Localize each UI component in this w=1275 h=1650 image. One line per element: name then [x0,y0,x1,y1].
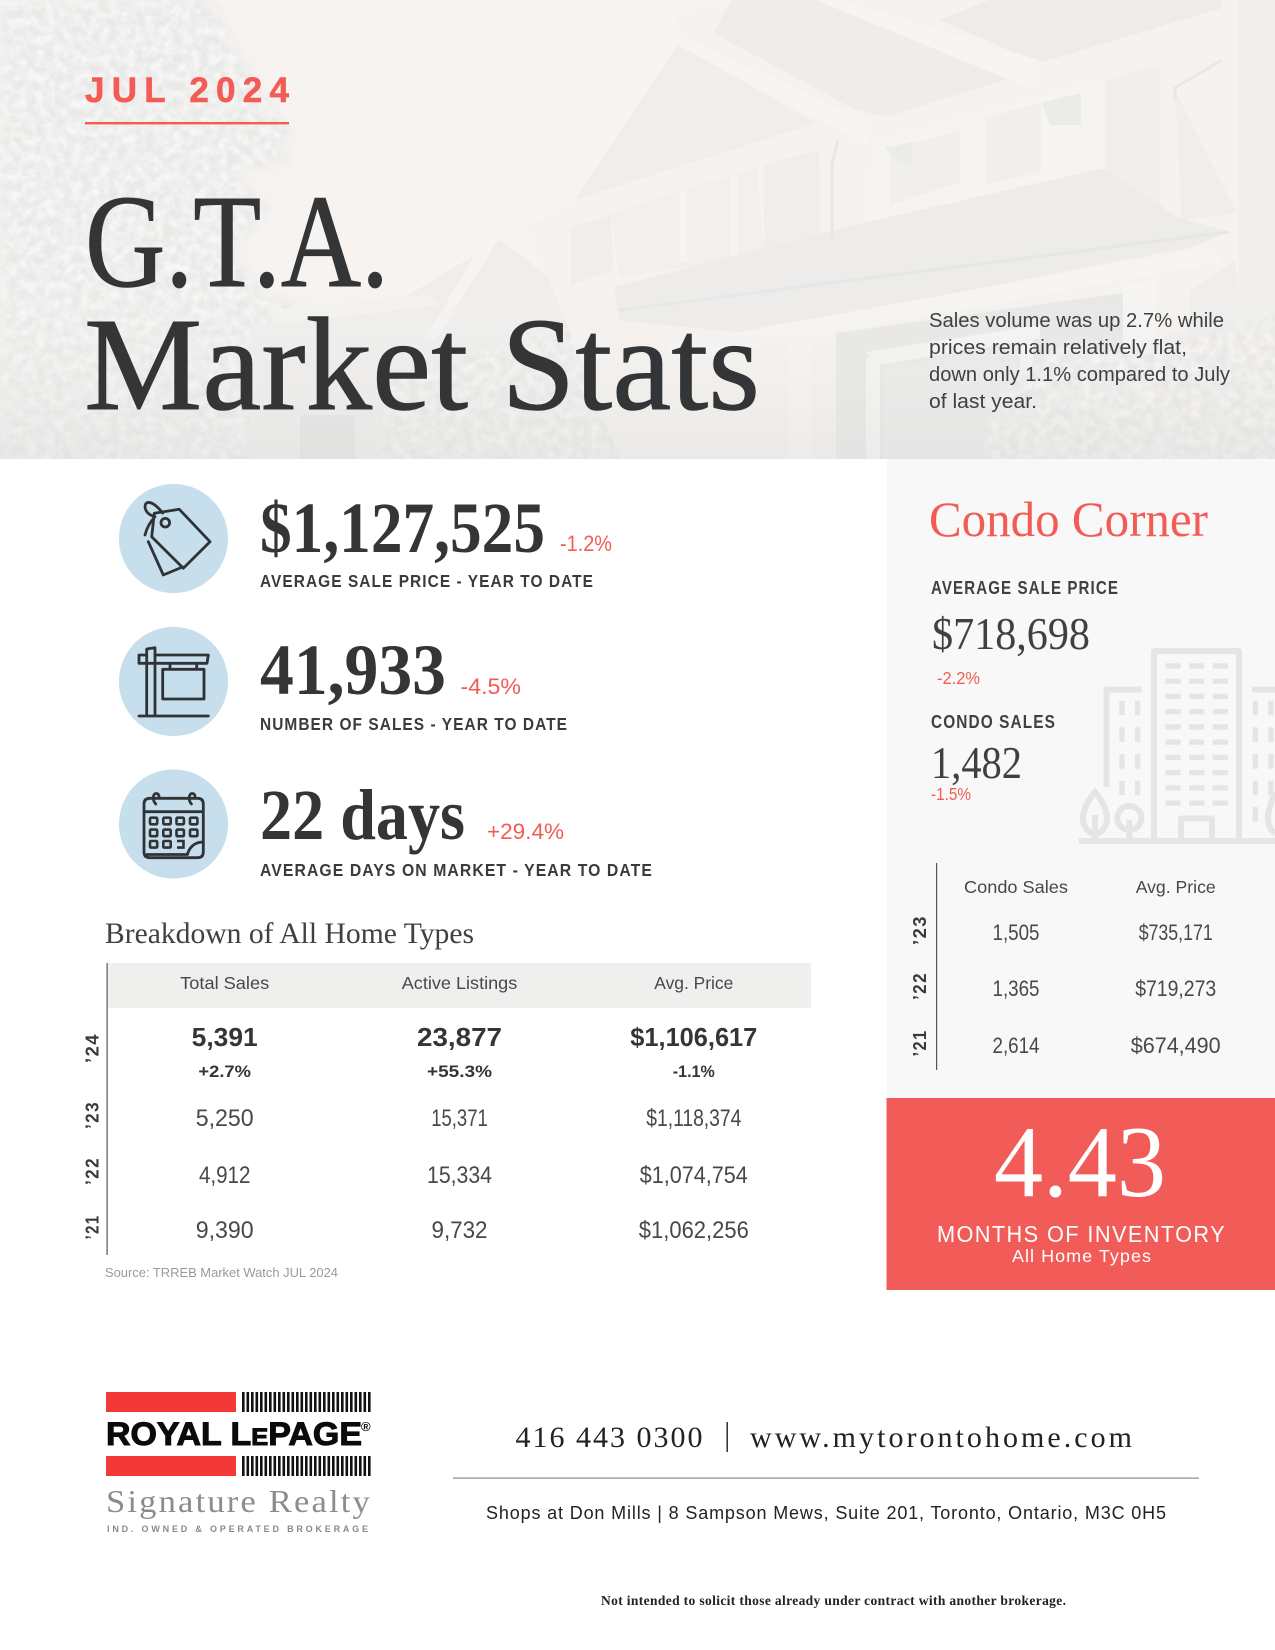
row 2021: 9,732 [432,1217,488,1244]
stat: days on market: AVERAGE DAYS ON MARKET - YEAR TO DATE [260,860,653,880]
row 2022: 15,334 [427,1162,492,1189]
stat: number of sales: -4.5% [460,674,521,699]
panel heading: Condo Corner [929,491,1208,547]
condo table header [964,877,1216,897]
icon: price tags [119,484,228,593]
intro paragraph: Sales volume was up 2.7% while [929,310,1224,332]
stat: number of sales: 41,933 [260,630,446,710]
title: Market Stats [84,290,760,438]
callout: months of inventory: All Home Types [1012,1246,1152,1266]
stat: average sale price [119,484,612,593]
title: G.T.A. [85,167,389,315]
row 2024: -1.1% [673,1062,715,1081]
year axis labels: ’22 [82,1157,102,1185]
condo rows: $735,171 [1139,920,1213,945]
condo average sale price: AVERAGE SALE PRICE [931,578,1119,598]
condo average sale price: -2.2% [937,668,980,688]
row 2021: $1,062,256 [639,1217,749,1244]
year axis labels: ’21 [82,1214,102,1240]
table header: Avg. Price [654,973,733,993]
stat: average sale price: $1,127,525 [260,488,545,568]
logo: Royal LePage Signature Realty: ® [361,1419,371,1434]
table header: Active Listings [402,973,518,993]
row 2021: 9,390 [196,1217,254,1244]
row 2024: $1,106,617 [630,1022,757,1052]
disclaimer: Not intended to solicit those already under contract with another brokerage. [601,1593,1066,1608]
condo rows: $719,273 [1135,976,1216,1001]
stat: days on market [119,769,653,880]
row 2023: 5,250 [196,1105,254,1132]
logo: Royal LePage Signature Realty: ROYAL L EPAGE [106,1416,362,1452]
condo sales: 1,482 [931,737,1022,788]
logo: Royal LePage Signature Realty: IND. OWNED & OPERATED BROKERAGE [107,1524,368,1534]
condo year labels [910,915,930,1056]
table: all home types [82,963,811,1255]
condo year labels: ’22 [910,972,930,1000]
condo rows: 1,365 [992,976,1040,1001]
condo rows: 2,614 [992,1033,1040,1058]
year axis labels: ’23 [82,1101,102,1129]
table header [180,973,733,993]
stat: average sale price: -1.2% [560,531,612,556]
heading: breakdown: Breakdown of All Home Types [105,917,474,950]
intro paragraph: down only 1.1% compared to July [929,364,1230,386]
main house [526,0,1275,470]
contact line [516,1421,1132,1454]
condo sales: -1.5% [931,784,971,804]
stat: number of sales [119,627,568,736]
bottom bushes [404,342,574,416]
stat: days on market: +29.4% [487,819,564,844]
address: Shops at Don Mills | 8 Sampson Mews, Suite 201, Toronto, Ontario, M3C 0H5 [486,1503,1166,1523]
intro paragraph: prices remain relatively flat, [929,337,1187,359]
condo year labels: ’21 [910,1030,930,1056]
condo sales: CONDO SALES [931,712,1056,732]
row 2023: 15,371 [431,1105,488,1132]
row 2023 [196,1105,741,1132]
logo: Royal LePage Signature Realty [106,1392,372,1534]
year axis labels [82,1033,102,1240]
condo table header: Avg. Price [1136,877,1216,897]
neighbouring house [282,308,355,459]
row 2024 [192,1022,757,1081]
hero background: faded house photo [0,0,1275,470]
row 2024: 23,877 [417,1022,502,1052]
row 2022: 4,912 [199,1162,250,1189]
intro paragraph: of last year. [929,391,1037,413]
condo year labels: ’23 [910,915,930,945]
condo rows: $674,490 [1131,1033,1221,1058]
year axis labels: ’24 [82,1033,102,1063]
row 2022: $1,074,754 [640,1162,748,1189]
row 2021 [196,1217,749,1244]
contact line: www.mytorontohome.com [750,1421,1132,1454]
stat: days on market: 22 days [260,775,465,855]
icon: for-sale sign [119,627,228,736]
title [84,167,760,438]
intro paragraph [929,310,1230,413]
row 2024: +2.7% [198,1062,251,1081]
callout: months of inventory: 4.43 [994,1106,1166,1219]
source note: Source: TRREB Market Watch JUL 2024 [105,1265,338,1280]
row 2023: $1,118,374 [646,1105,741,1132]
callout: months of inventory: MONTHS OF INVENTORY [937,1221,1226,1247]
stat: number of sales: NUMBER OF SALES - YEAR TO DATE [260,714,568,734]
icon: calendar [119,769,228,879]
table: condo history [910,863,1221,1070]
condo average sale price [931,578,1119,688]
date label: JUL 2024 [85,71,290,110]
condo table header: Condo Sales [964,877,1068,897]
condo rows: 1,505 [992,920,1040,945]
icon: city buildings [1079,651,1275,841]
row 2024: +55.3% [427,1062,492,1081]
callout: months of inventory [886,1098,1275,1290]
condo sales [931,712,1056,804]
logo: Royal LePage Signature Realty: Signature Realty [106,1483,372,1519]
stat: average sale price: AVERAGE SALE PRICE - YEAR TO DATE [260,571,594,591]
row 2024: 5,391 [192,1022,258,1052]
table header: Total Sales [180,973,269,993]
panel: condo corner [887,459,1275,1098]
condo average sale price: $718,698 [932,608,1090,659]
condo rows [992,920,1221,1058]
left tree [2,1,290,451]
row 2022 [199,1162,748,1189]
contact line: 416 443 0300 [516,1421,702,1454]
